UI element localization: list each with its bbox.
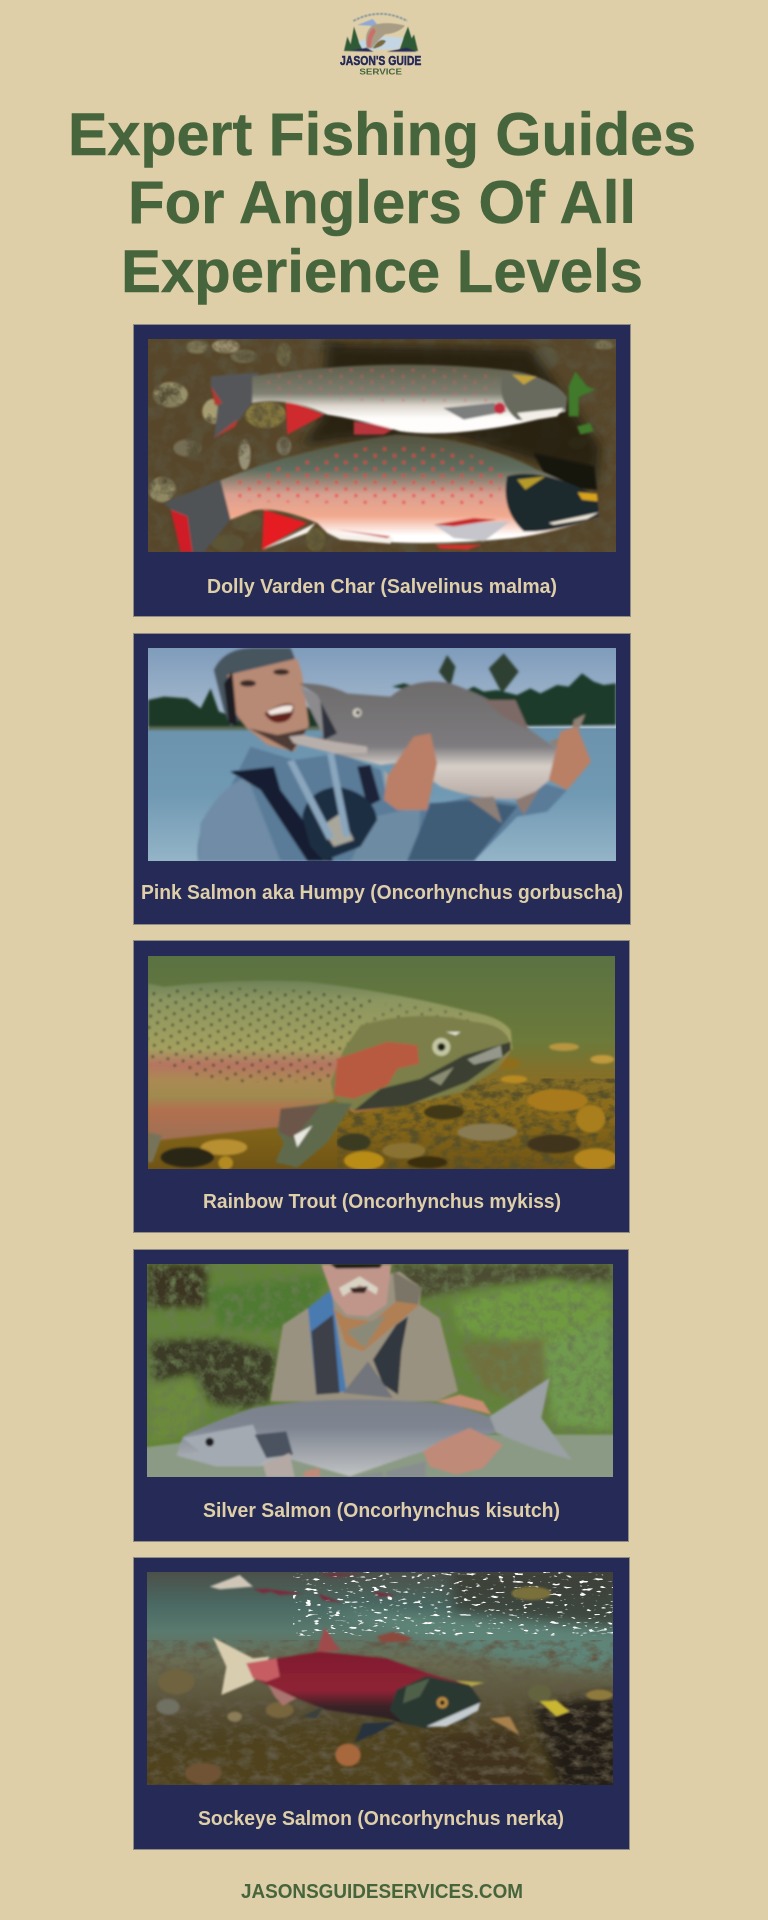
logo on shirt bbox=[302, 787, 377, 861]
title: Expert Fishing Guides bbox=[68, 101, 696, 168]
logo: Jason's Guide Service: SERVICE bbox=[359, 67, 403, 77]
panel: Silver Salmon bbox=[134, 1250, 628, 1541]
caption: Pink Salmon aka Humpy (Oncorhynchus gorbuscha) bbox=[141, 882, 623, 904]
fish body bbox=[148, 981, 512, 1142]
hat and head bbox=[214, 648, 301, 727]
gill plate bbox=[331, 1016, 511, 1110]
logo: Jason's Guide Service bbox=[340, 12, 422, 77]
pectoral fin bbox=[276, 1102, 352, 1167]
angler bbox=[270, 1271, 458, 1401]
panel: Pink Salmon bbox=[134, 634, 630, 924]
photo: angler holding a pink salmon beside a river bbox=[148, 648, 616, 861]
hoodie bbox=[198, 747, 567, 861]
hands bbox=[384, 733, 437, 810]
footer website link text: JASONSGUIDESERVICES.COM bbox=[241, 1881, 523, 1903]
photo: two Dolly Varden char on river rocks bbox=[148, 339, 616, 552]
panel: Rainbow Trout bbox=[134, 941, 629, 1232]
caption: Rainbow Trout (Oncorhynchus mykiss) bbox=[203, 1191, 561, 1213]
upper fish bbox=[211, 372, 259, 438]
fish bbox=[291, 682, 567, 799]
caption: Silver Salmon (Oncorhynchus kisutch) bbox=[203, 1500, 560, 1522]
photo: rainbow trout underwater over golden gravel bbox=[148, 956, 615, 1169]
fish bbox=[343, 1361, 393, 1398]
sockeye bbox=[213, 1637, 270, 1695]
title bbox=[68, 101, 696, 305]
photo: angler holding a silver salmon by a green bank bbox=[147, 1264, 613, 1477]
panel: Sockeye Salmon bbox=[134, 1558, 629, 1849]
caption: Dolly Varden Char (Salvelinus malma) bbox=[207, 576, 557, 598]
panel: Dolly Varden Char bbox=[134, 325, 630, 616]
straps bbox=[231, 767, 334, 861]
caption: Sockeye Salmon (Oncorhynchus nerka) bbox=[198, 1808, 564, 1830]
title: Experience Levels bbox=[121, 238, 643, 305]
title: For Anglers Of All bbox=[128, 169, 636, 236]
lower fish bbox=[164, 480, 231, 552]
photo: sockeye salmon underwater over a rocky bed bbox=[147, 1572, 613, 1785]
